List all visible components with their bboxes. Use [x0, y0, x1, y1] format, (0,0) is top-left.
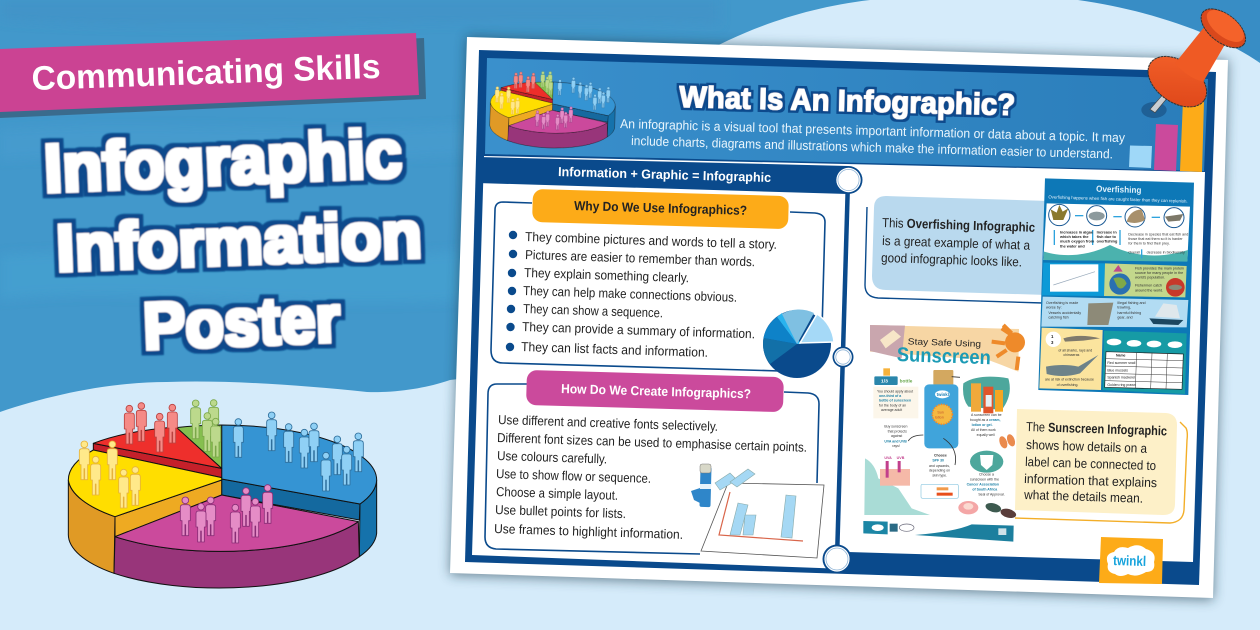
food chain section: Increase in: [1097, 230, 1117, 234]
callout: overfishing: This Overfishing Infographic: [882, 215, 1035, 235]
threatened species section: 1: [1051, 334, 1054, 339]
fishing methods section: Overfishing is made: [1046, 301, 1078, 305]
fish data table section: Golden ring prawn: [1107, 383, 1136, 387]
twinkl logo: [1099, 537, 1163, 584]
uv text and skin diagram: UVB: [897, 456, 905, 460]
seal of approval: of South Africa: [972, 487, 997, 491]
mini poster background: [1038, 178, 1194, 395]
graph and food section: Fishermen catch: [1135, 284, 1162, 288]
heading pill: Why Do We Use Infographics?: [574, 198, 747, 218]
sunscreen products: All of them work: [971, 428, 996, 432]
twinkl logo: twinkl: [1113, 552, 1146, 569]
food chain section: for them to find their prey.: [1128, 242, 1170, 246]
food chain section: the water and: [1060, 244, 1085, 248]
sunscreen footer: [863, 521, 1014, 542]
fishing methods section: Vessels accidentally: [1048, 311, 1081, 315]
information plus graphic band: [477, 157, 848, 194]
uv text and skin diagram: UVA and UVB: [884, 439, 907, 443]
threatened species section: [1039, 328, 1103, 390]
main title: [42, 115, 423, 363]
panel: why do we use infographics: [491, 189, 834, 378]
banner: Communicating Skills: Communicating Skills: [31, 48, 381, 98]
food chain section: Decrease in species that eat fish and: [1128, 232, 1188, 236]
poster sheet: [450, 37, 1228, 598]
spf advice: [921, 454, 958, 498]
header bar chart: [1129, 100, 1204, 172]
callout: sunscreen: what the details mean.: [1023, 487, 1143, 506]
one third bottle tip: for the body of an: [879, 403, 906, 407]
small pie chart: [763, 309, 834, 378]
bullet list text: [521, 229, 777, 360]
fishing methods section: harmful fishing: [1117, 311, 1141, 315]
tips text: Different font sizes can be used to emphasise certain points.: [497, 430, 807, 455]
spf advice: depending on: [929, 469, 950, 473]
poster white content area: [472, 156, 1205, 569]
one third bottle tip: bottle of sunscreen: [879, 399, 911, 403]
spf advice: and upwards,: [929, 464, 950, 468]
bullets: [506, 231, 517, 351]
spf advice: Choose: [934, 454, 947, 458]
tips text: Use to show flow or sequence.: [496, 466, 651, 486]
threatened species section: of all sharks, rays and: [1058, 349, 1092, 353]
graph and food section: Fish provides the main protein: [1135, 266, 1184, 270]
uv text and skin diagram: against: [891, 434, 902, 438]
uv text and skin diagram: [864, 425, 930, 515]
icon: red push pin: [1139, 1, 1252, 118]
fish data table section: Name: [1116, 354, 1126, 358]
tips text: Use different and creative fonts selectively.: [498, 412, 718, 434]
fish data table section: Red summer snail: [1107, 361, 1136, 365]
tips text: Use colours carefully.: [497, 448, 607, 466]
one third bottle tip: average adult: [881, 408, 902, 412]
poster intro text: include charts, diagrams and illustrations which make the information easier to understand.: [631, 133, 1113, 161]
sunscreen heading: Stay Safe Using: [908, 336, 981, 349]
poster frame: [465, 50, 1216, 585]
bullet list text: They combine pictures and words to tell a story.: [525, 229, 777, 252]
bullet list text: They can list facts and information.: [521, 339, 708, 360]
graph and food section: world's population.: [1135, 276, 1165, 280]
food chain section: much oxygen from: [1060, 240, 1095, 244]
food chain section: fish due to: [1097, 235, 1117, 239]
poster intro text: An infographic is a visual tool that presents important information or data about a topic. It may: [620, 116, 1126, 145]
panel outline: [491, 202, 825, 371]
fishing methods section: trawling,: [1117, 306, 1131, 310]
callout: sunscreen: The Sunscreen Infographic: [1026, 419, 1167, 438]
seal of approval: [967, 451, 1005, 496]
flip flops: [998, 433, 1017, 450]
overfishing mini infographic: [1038, 178, 1194, 395]
information plus graphic band: Information + Graphic = Infographic: [558, 164, 771, 185]
uv text and skin diagram: UVA: [884, 456, 892, 460]
sunscreen bottle: [908, 370, 960, 465]
callout: overfishing: good infographic looks like.: [881, 250, 1022, 269]
vertical connector line: [837, 180, 848, 559]
bullet list text: They can show a sequence.: [523, 301, 663, 320]
sunscreen products: [963, 377, 1010, 437]
sunscreen bottle: Sun: [937, 411, 944, 415]
connector circle middle: [832, 346, 854, 368]
main title: Poster: [142, 281, 341, 363]
sunscreen products: A sunscreen can be: [971, 413, 1002, 417]
uv text and skin diagram: Buy sunscreen: [884, 425, 907, 429]
threatened species section: chimaeras: [1063, 353, 1080, 357]
bullet list text: They can provide a summary of information.: [522, 319, 755, 341]
fishing methods section: gear, and: [1117, 316, 1133, 320]
one third bottle tip: one-third of a: [879, 394, 901, 398]
fishing methods section: [1041, 297, 1188, 327]
main title: Information: [55, 197, 423, 285]
pie chart illustration with people: [68, 400, 377, 588]
mini poster title: Overfishing: [1096, 184, 1142, 195]
heading pill: [532, 189, 789, 229]
fish data table section: Spanish mackerel: [1107, 376, 1135, 380]
sunscreen products: lotion or gel.: [972, 423, 993, 427]
callout: sunscreen: information that explains: [1024, 471, 1158, 490]
main title: Infographic: [42, 115, 403, 207]
one third bottle tip: bottle: [900, 379, 913, 384]
connector circle bottom: [822, 544, 852, 574]
panel: how do we create infographics: [485, 370, 824, 558]
callout: sunscreen: label can be connected to: [1025, 454, 1156, 473]
sunscreen products: equally well: [977, 433, 995, 437]
heading pill: [526, 370, 784, 412]
connector circle top: [834, 166, 862, 194]
graph and food section: around the world.: [1135, 288, 1163, 292]
tips text: [494, 412, 807, 542]
food chain section: decrease in biodiversity: [1147, 250, 1185, 254]
seal of approval: Cancer Association: [967, 482, 999, 486]
food chain section: Increases in algae: [1060, 230, 1093, 234]
mini poster subtitle: Overfishing happens when fish are caught faster than they can replenish.: [1048, 194, 1188, 204]
sunscreen products: bought as a cream,: [970, 418, 1000, 422]
callout: sunscreen: [1015, 409, 1187, 523]
spf advice: skin type.: [932, 473, 947, 477]
sunscreen bottle: twinkl: [937, 392, 949, 397]
bullet list text: They explain something clearly.: [524, 265, 689, 285]
banner: Communicating Skills: [0, 33, 426, 118]
tips text: Use bullet points for lists.: [495, 502, 626, 521]
seal of approval: Seal of Approval.: [978, 492, 1005, 496]
header pie illustration: [489, 70, 616, 150]
fish data table section: Blue mussels: [1107, 368, 1128, 372]
one third bottle tip: You should apply about: [877, 389, 913, 393]
uv text and skin diagram: rays!: [892, 444, 900, 448]
panel outline: [485, 384, 819, 554]
heading pill: How Do We Create Infographics?: [561, 381, 751, 401]
food chain section: those that eat them so it is harder: [1128, 237, 1183, 241]
callout: sunscreen: shows how details on a: [1026, 437, 1148, 456]
threatened species section: of overfishing.: [1057, 383, 1078, 387]
callout: overfishing: is a great example of what a: [882, 233, 1031, 253]
header band: [485, 58, 1208, 172]
sunscreen mini infographic: [863, 325, 1025, 542]
poster title: What Is An Infographic?: [679, 79, 1016, 122]
one third bottle tip: 1/3: [881, 379, 888, 385]
tips text: Choose a simple layout.: [496, 484, 618, 503]
sunscreen bottle: lotion: [935, 415, 944, 419]
threatened species section: 3: [1051, 340, 1054, 345]
bullet list text: Pictures are easier to remember than words.: [525, 247, 755, 269]
food chain section: Overall: [1128, 250, 1140, 254]
callout: overfishing: [865, 196, 1050, 303]
food chain section: [1043, 203, 1190, 262]
sunscreen header: [870, 325, 1025, 372]
seal of approval: sunscreen with the: [970, 477, 999, 481]
food chain section: overfishing: [1097, 240, 1118, 244]
graph and food section: source for many people in the: [1135, 271, 1183, 275]
poster: [450, 37, 1228, 598]
threatened species section: are at risk of extinction because: [1045, 378, 1094, 382]
fishing methods section: worse by:: [1046, 306, 1062, 310]
sunscreen header: Sunscreen: [896, 344, 991, 369]
glue stick and paper chart illustration: [691, 464, 824, 558]
food chain section: which takes the: [1059, 235, 1089, 239]
graph and food section: [1042, 263, 1187, 297]
tips text: Use frames to highlight information.: [494, 521, 683, 542]
hat and sunglasses: [958, 501, 1017, 520]
spf advice: SPF 30: [932, 459, 944, 463]
fishing methods section: Illegal fishing and: [1117, 301, 1146, 305]
poster shadow: [450, 37, 1228, 600]
fishing methods section: catching fish: [1048, 316, 1069, 320]
one third bottle tip: [873, 368, 918, 418]
fish data table section: [1103, 331, 1187, 394]
poster intro text: [620, 116, 1126, 161]
bullet list text: They can help make connections obvious.: [523, 283, 737, 305]
seal of approval: Choose a: [979, 473, 994, 477]
uv text and skin diagram: that protects: [888, 429, 907, 433]
